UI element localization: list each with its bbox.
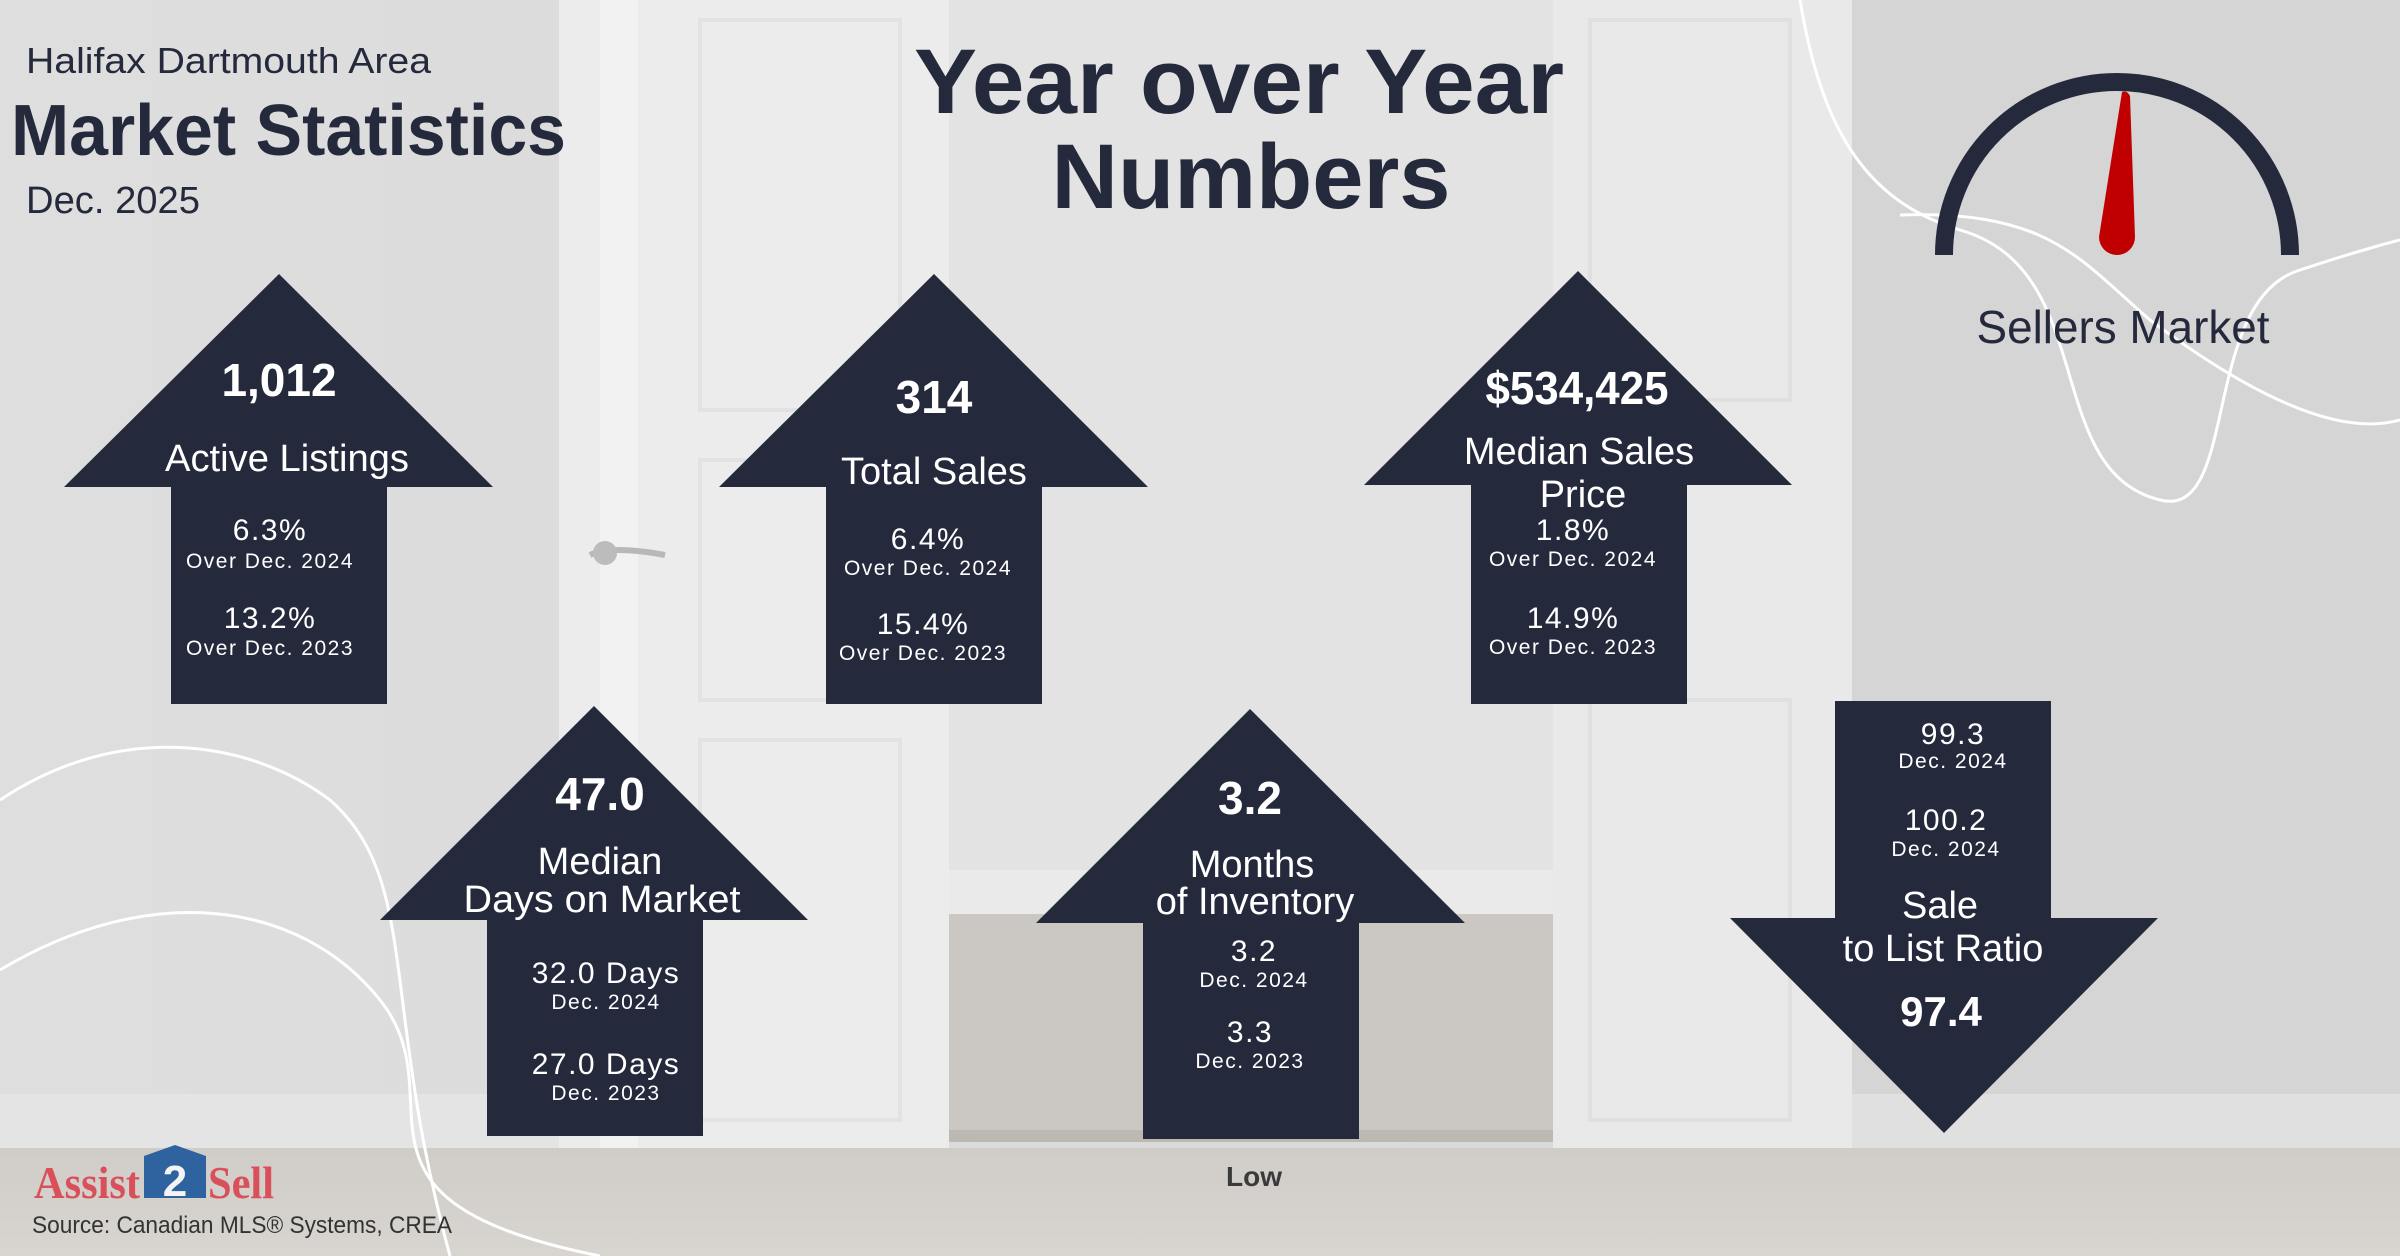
header: date: Dec. 2025 xyxy=(26,180,200,222)
logo: Assist2Sell: 2 xyxy=(163,1157,187,1206)
arrow down: sale to list ratio: Dec. 2024 xyxy=(1891,838,2001,861)
arrow: total sales xyxy=(719,274,1148,704)
arrow: total sales: Over Dec. 2023 xyxy=(839,642,1007,665)
arrow: median sales price: Over Dec. 2023 xyxy=(1489,636,1657,659)
arrow: months of inventory: Dec. 2023 xyxy=(1195,1050,1305,1073)
arrow down: sale to list ratio: 99.3 xyxy=(1921,718,1985,751)
arrow: median days on market: 32.0 Days xyxy=(532,957,680,990)
gauge: sellers market: Sellers Market xyxy=(1976,301,2270,353)
arrow: total sales: 15.4% xyxy=(877,608,969,641)
arrow: active listings: 1,012 xyxy=(221,354,337,406)
arrow: months of inventory xyxy=(1036,709,1465,1139)
arrow down: sale to list ratio: 97.4 xyxy=(1900,988,1983,1035)
gauge needle xyxy=(2099,92,2135,255)
header: area label: Halifax Dartmouth Area xyxy=(26,40,432,81)
arrow: median sales price: 14.9% xyxy=(1527,602,1619,635)
arrow: median sales price: $534,425 xyxy=(1486,362,1668,414)
arrow: median days on market: Median xyxy=(538,841,662,883)
arrow: median days on market xyxy=(380,706,808,1136)
arrow: total sales: 6.4% xyxy=(891,523,965,556)
arrow: months of inventory: of Inventory xyxy=(1156,881,1354,923)
arrow down: sale to list ratio: Dec. 2024 xyxy=(1898,750,2008,773)
arrow: active listings: Over Dec. 2023 xyxy=(186,637,354,660)
arrow: active listings: Over Dec. 2024 xyxy=(186,550,354,573)
arrow: median days on market: 27.0 Days xyxy=(532,1048,680,1081)
arrow: months of inventory: Dec. 2024 xyxy=(1199,969,1309,992)
arrow: active listings: Active Listings xyxy=(165,438,409,480)
arrow: median sales price: 1.8% xyxy=(1536,514,1610,547)
arrow: total sales: Total Sales xyxy=(841,451,1027,493)
arrow: median sales price: Median Sales xyxy=(1464,431,1694,473)
logo: Assist2Sell xyxy=(34,1145,274,1208)
main heading: Numbers xyxy=(1052,126,1450,228)
arrow: median sales price xyxy=(1364,271,1792,704)
logo: Assist2Sell: Sell xyxy=(208,1157,274,1208)
arrow: active listings: 6.3% xyxy=(233,514,307,547)
logo: Assist2Sell: Assist xyxy=(34,1157,141,1208)
arrow: median days on market: Dec. 2024 xyxy=(551,991,661,1014)
arrow: median sales price: Price xyxy=(1540,474,1626,516)
arrow: total sales: Over Dec. 2024 xyxy=(844,557,1012,580)
arrow: median days on market: Dec. 2023 xyxy=(551,1082,661,1105)
arrow: active listings: 13.2% xyxy=(224,602,316,635)
arrow: median days on market: 47.0 xyxy=(555,768,645,820)
arrow: months of inventory: 3.2 xyxy=(1231,935,1277,968)
label: low: Low xyxy=(1226,1161,1282,1192)
header: main title: Market Statistics xyxy=(11,91,566,171)
source note: Source: Canadian MLS® Systems, CREA xyxy=(32,1212,452,1239)
main heading xyxy=(914,31,1564,228)
arrow: months of inventory: Months xyxy=(1190,844,1314,886)
arrow down: sale to list ratio: Sale xyxy=(1902,885,1978,927)
arrow down: sale to list ratio: to List Ratio xyxy=(1843,928,2043,970)
gauge: sellers market xyxy=(1944,82,2290,353)
arrow: months of inventory: 3.2 xyxy=(1218,772,1282,824)
arrow down: sale to list ratio xyxy=(1730,701,2158,1133)
arrow: total sales: 314 xyxy=(896,371,973,423)
main heading: Year over Year xyxy=(914,31,1564,133)
arrow: active listings xyxy=(64,274,493,704)
arrow down: sale to list ratio: 100.2 xyxy=(1905,804,1987,837)
arrow: months of inventory: 3.3 xyxy=(1227,1016,1273,1049)
arrow: median sales price: Over Dec. 2024 xyxy=(1489,548,1657,571)
arrow: median days on market: Days on Market xyxy=(464,879,741,921)
